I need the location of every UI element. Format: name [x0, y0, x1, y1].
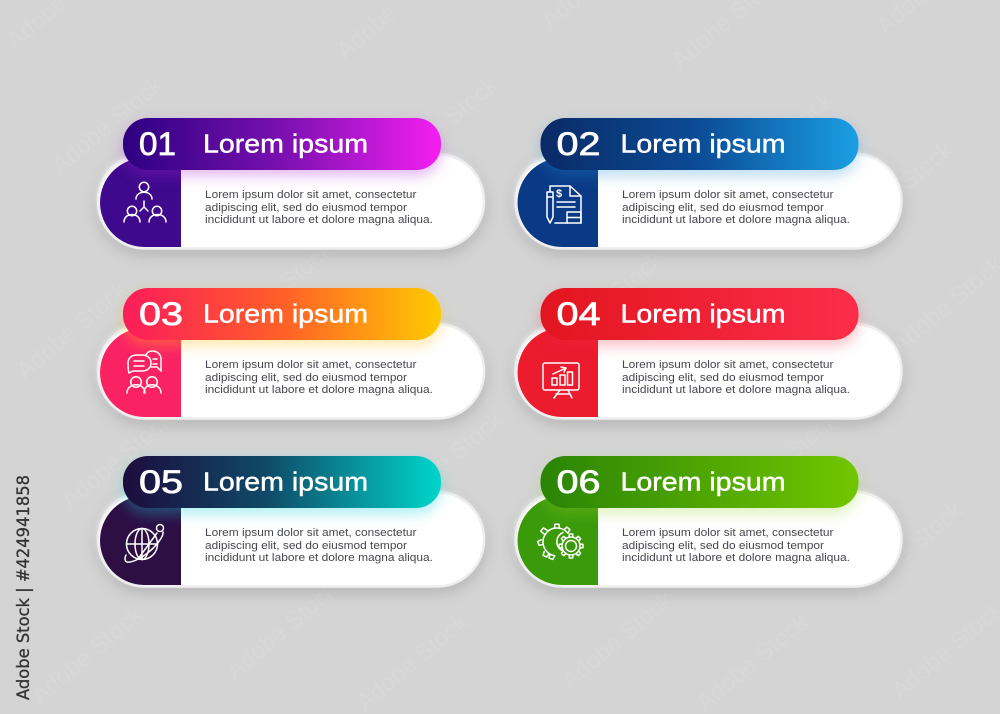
body text: incididunt ut labore et dolore magna aliqua.: [205, 384, 433, 396]
body text: [622, 527, 850, 564]
header bar: Lorem ipsum: [620, 466, 786, 496]
body text: [205, 527, 433, 564]
colour block: [100, 158, 181, 247]
body text: incididunt ut labore et dolore magna aliqua.: [205, 552, 433, 564]
watermarks: Adobe Stock: [387, 406, 509, 515]
body text: Lorem ipsum dolor sit amet, consectetur: [205, 359, 417, 371]
header bar: [540, 118, 858, 170]
watermarks: Adobe Stock: [217, 236, 339, 345]
body text: adipiscing elit, sed do eiusmod tempor: [622, 540, 824, 552]
panel body: [516, 492, 902, 586]
header bar: [540, 288, 858, 340]
panel: step 03: [98, 288, 484, 418]
body text: adipiscing elit, sed do eiusmod tempor: [205, 372, 407, 384]
body text: adipiscing elit, sed do eiusmod tempor: [205, 540, 407, 552]
body text: Lorem ipsum dolor sit amet, consectetur: [205, 189, 417, 201]
panel: step 06: [516, 456, 902, 586]
header bar: Lorem ipsum: [203, 128, 368, 158]
colour block: [518, 496, 598, 585]
watermarks: Adobe Stock: [717, 86, 839, 195]
header bar: Lorem ipsum: [620, 298, 786, 328]
panel: step 04: [516, 288, 902, 418]
body text: Lorem ipsum dolor sit amet, consectetur: [622, 359, 834, 371]
body text: Lorem ipsum dolor sit amet, consectetur: [205, 527, 417, 539]
header bar: 06: [556, 464, 600, 500]
header bar: Lorem ipsum: [620, 128, 786, 158]
body text: [622, 359, 850, 396]
panel: step 01: [98, 118, 484, 248]
watermarks: Adobe Stock: [847, 496, 969, 605]
watermarks: Adobe Stock: [27, 601, 149, 710]
watermarks: Adobe Stock: [722, 406, 844, 515]
header bar: [123, 118, 441, 170]
header bar: [123, 456, 441, 508]
header bar: Lorem ipsum: [203, 298, 368, 328]
colour block: [100, 328, 181, 417]
panel: step 05: [98, 456, 484, 586]
icon: globe with orbit: [125, 524, 164, 562]
header bar: Lorem ipsum: [203, 466, 368, 496]
body text: [205, 189, 433, 226]
body text: Lorem ipsum dolor sit amet, consectetur: [622, 189, 834, 201]
panel body: [516, 154, 902, 248]
colour block: [100, 496, 181, 585]
body text: adipiscing elit, sed do eiusmod tempor: [205, 202, 407, 214]
panel body: [98, 324, 484, 418]
watermarks: Adobe Stock: [692, 608, 814, 714]
watermarks: Adobe Stock: [547, 246, 669, 355]
body text: [622, 189, 850, 226]
icon: document and pencil: $: [556, 188, 562, 200]
watermarks: Adobe: [332, 0, 402, 65]
body text: incididunt ut labore et dolore magna aliqua.: [205, 214, 433, 226]
body text: incididunt ut labore et dolore magna aliqua.: [622, 552, 850, 564]
header bar: 04: [556, 296, 600, 332]
stock id label: Adobe Stock | #424941858: [14, 475, 34, 700]
body text: incididunt ut labore et dolore magna aliqua.: [622, 214, 850, 226]
icon: presentation board: [543, 363, 579, 398]
body text: adipiscing elit, sed do eiusmod tempor: [622, 202, 824, 214]
icon: document and pencil: [547, 186, 581, 223]
watermarks: Adobe Stock: [382, 71, 504, 180]
header bar: 01: [139, 126, 176, 162]
watermarks: Adobe Stock: [222, 576, 344, 685]
panel body: [98, 154, 484, 248]
colour block: [518, 158, 598, 247]
icon: people network: [124, 182, 166, 222]
watermarks: Adobe Stock: [837, 136, 959, 245]
panel body: [516, 324, 902, 418]
colour block: [518, 328, 598, 417]
watermarks: Adobe Stock: [557, 586, 679, 695]
panel body: [98, 492, 484, 586]
body text: adipiscing elit, sed do eiusmod tempor: [622, 372, 824, 384]
watermarks: Adobe Stock: [12, 276, 134, 385]
icon: chat and people: [127, 351, 161, 393]
watermarks: Adobe Stock: [352, 608, 474, 714]
body text: incididunt ut labore et dolore magna aliqua.: [622, 384, 850, 396]
header bar: [540, 456, 858, 508]
header bar: [123, 288, 441, 340]
watermarks: Adobe Stock: [57, 406, 179, 515]
panel: step 02: [516, 118, 902, 248]
body text: Lorem ipsum dolor sit amet, consectetur: [622, 527, 834, 539]
header bar: 02: [556, 126, 600, 162]
header bar: 03: [139, 296, 183, 332]
icon: gears: [538, 524, 583, 560]
header bar: 05: [139, 464, 183, 500]
body text: [205, 359, 433, 396]
watermarks: Adobe Stock: [47, 71, 169, 180]
